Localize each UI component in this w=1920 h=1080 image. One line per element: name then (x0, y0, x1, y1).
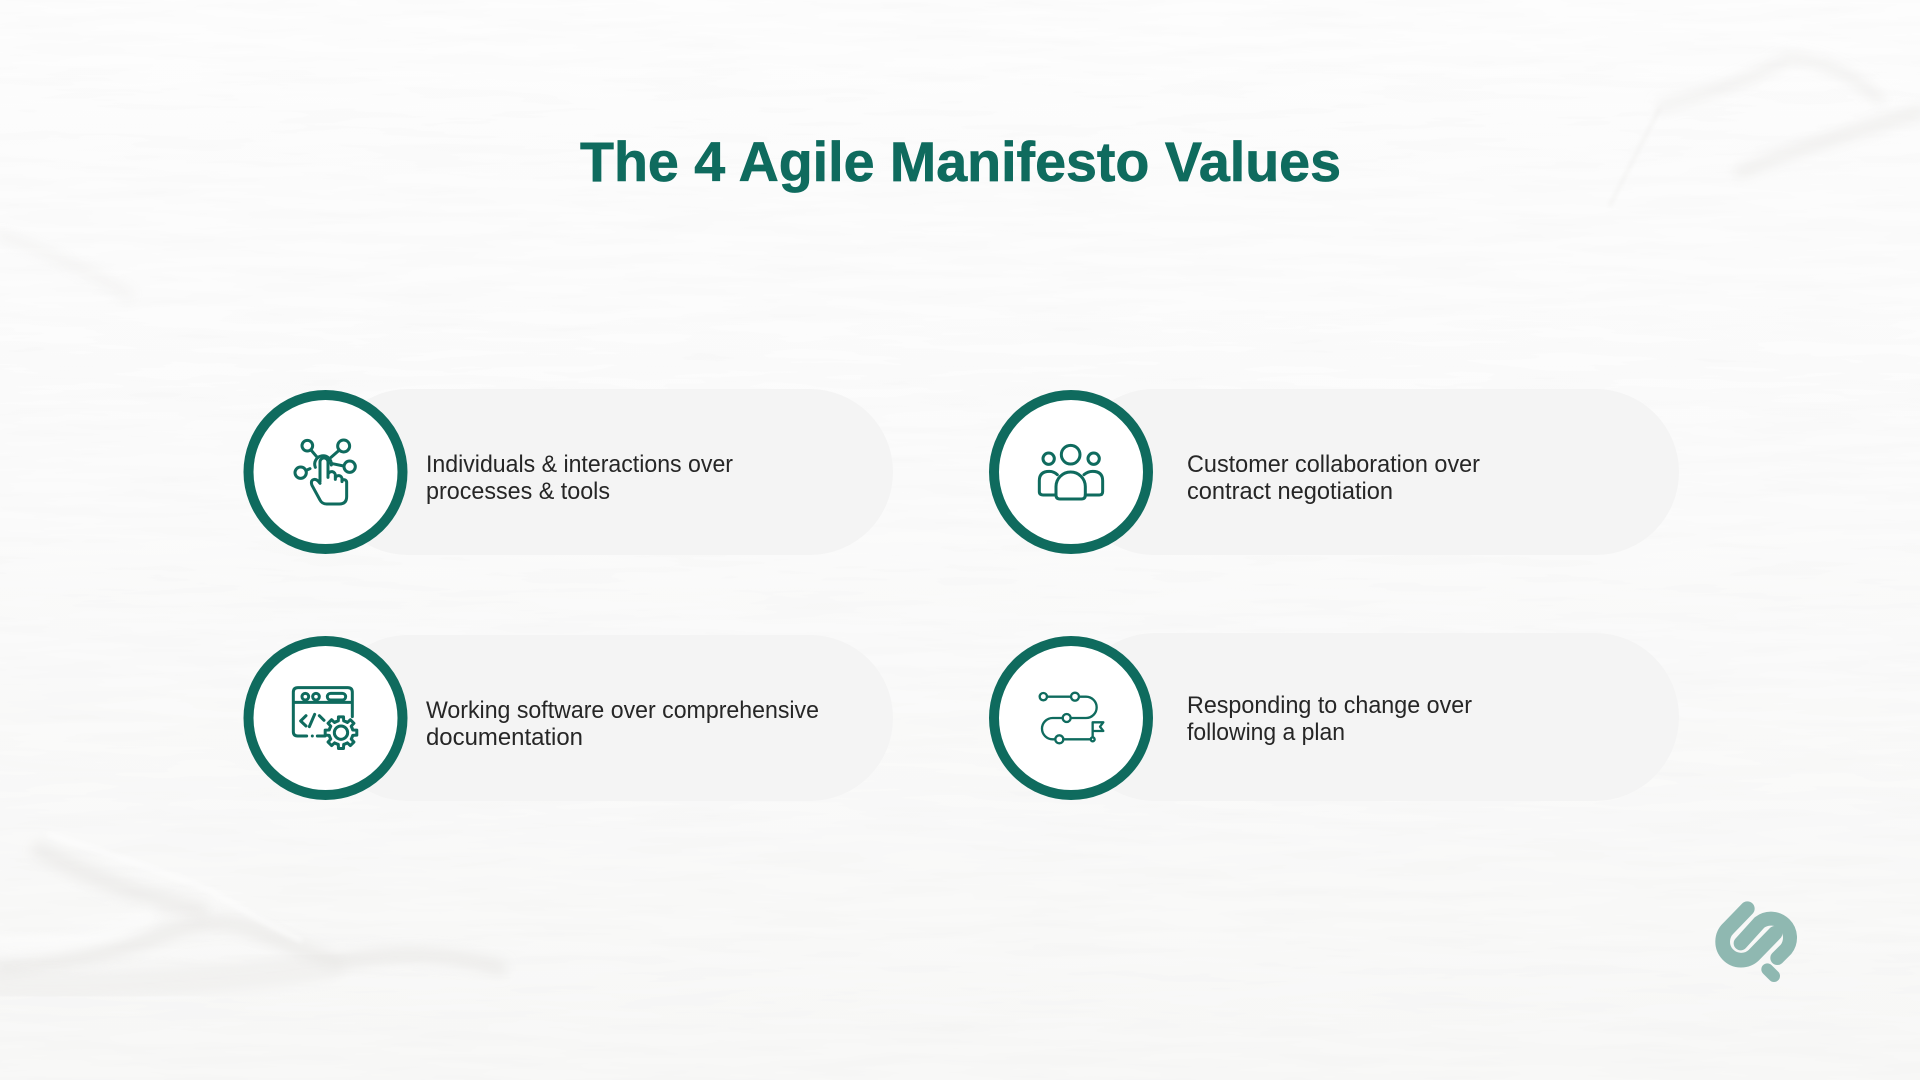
icon ring (248, 641, 402, 795)
text: Responding to change over (1187, 692, 1472, 719)
text: Individuals & interactions over (426, 451, 733, 478)
panel: individuals and interactions (248, 389, 893, 555)
pill background (325, 389, 893, 555)
text (426, 697, 819, 751)
text: documentation (426, 724, 583, 751)
text (1187, 451, 1480, 505)
text (1187, 692, 1472, 746)
text: processes & tools (426, 478, 610, 505)
icon ring (248, 395, 402, 549)
icon: team of people (1039, 445, 1103, 499)
panel: responding to change (994, 633, 1679, 801)
panel: customer collaboration (994, 389, 1679, 555)
text: contract negotiation (1187, 478, 1393, 505)
icon ring (994, 641, 1148, 795)
text (426, 451, 733, 505)
icon: browser window with gear (293, 688, 357, 748)
pill background (325, 635, 893, 801)
panel: working software (248, 635, 893, 801)
title: The 4 Agile Manifesto Values (580, 130, 1341, 193)
text: Customer collaboration over (1187, 451, 1480, 478)
icon ring (994, 395, 1148, 549)
text: Working software over comprehensive (426, 697, 819, 724)
pill background (1071, 633, 1679, 801)
text: following a plan (1187, 719, 1345, 746)
pill background (1071, 389, 1679, 555)
logo (1723, 909, 1790, 976)
icon: hand tapping network (295, 440, 355, 504)
icon: route with flag (1040, 693, 1103, 743)
